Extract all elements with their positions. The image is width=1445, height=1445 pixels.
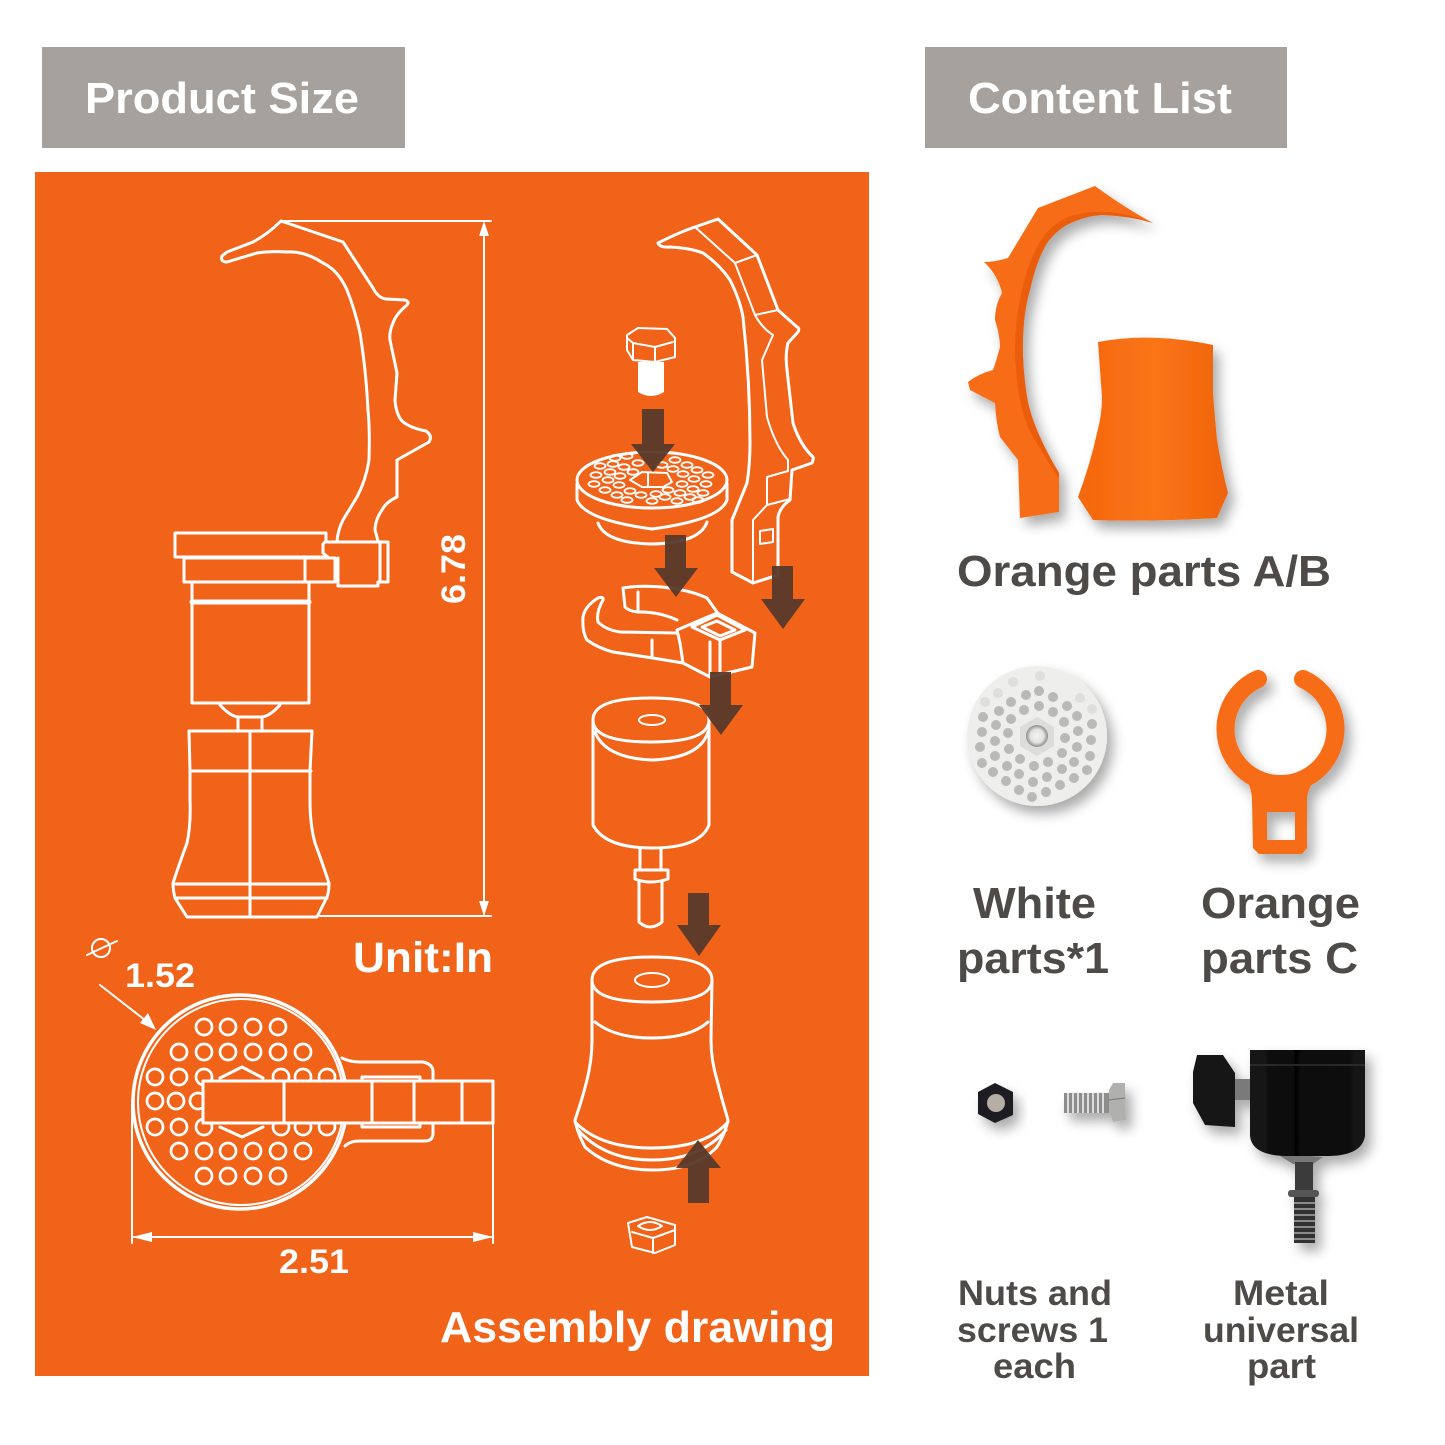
clamp and arm from above xyxy=(342,1058,433,1146)
exploded nut xyxy=(628,1217,675,1253)
heading: Content List: Content List xyxy=(968,74,1232,123)
label: nuts and screws xyxy=(957,1274,1112,1386)
photo: screw xyxy=(1064,1083,1126,1122)
unit label: Unit:In xyxy=(353,934,493,982)
top view drawing with dimensions: 2.51 xyxy=(279,1243,349,1281)
photo: white part xyxy=(967,666,1107,806)
base vase xyxy=(173,731,329,917)
top view drawing with dimensions xyxy=(87,939,493,1281)
heading: Product Size xyxy=(42,47,405,148)
exploded perforated disc xyxy=(577,452,727,544)
exploded screw xyxy=(627,328,675,396)
photo: nut xyxy=(978,1083,1013,1123)
label: orange parts C xyxy=(1201,879,1360,983)
dimension 6.78 xyxy=(283,221,491,916)
connecting stem xyxy=(220,705,280,730)
photo: metal universal part xyxy=(1193,1050,1365,1243)
part B vase xyxy=(1078,338,1228,521)
exploded arm xyxy=(658,219,813,583)
label: metal universal part: universal xyxy=(1203,1311,1359,1350)
label: white parts xyxy=(957,879,1109,983)
label: metal universal part xyxy=(1203,1274,1359,1386)
disc xyxy=(133,995,347,1209)
caption: assembly drawing: Assembly drawing xyxy=(440,1303,835,1352)
disc holes xyxy=(147,1019,335,1184)
label: white parts: White xyxy=(973,879,1096,928)
label: white parts: parts*1 xyxy=(957,934,1109,983)
label: orange parts A/B: Orange parts A/B xyxy=(957,547,1331,596)
cylinder body xyxy=(192,582,309,703)
side view drawing with height dimension: 6.78 xyxy=(435,534,473,604)
side view drawing with height dimension xyxy=(173,221,491,917)
top view drawing with dimensions: 1.52 xyxy=(125,957,195,995)
label: orange parts C: Orange xyxy=(1201,879,1360,928)
arm outline xyxy=(222,221,430,541)
heading: Content List xyxy=(925,47,1287,148)
panel: assembly drawing xyxy=(35,172,869,1376)
photo: orange part C xyxy=(1226,679,1335,854)
exploded base xyxy=(575,957,728,1170)
label: metal universal part: Metal xyxy=(1233,1274,1329,1313)
label: nuts and screws: screws 1 xyxy=(957,1311,1108,1350)
label: nuts and screws: each xyxy=(993,1347,1076,1386)
clamp plates xyxy=(175,533,388,586)
exploded C clamp xyxy=(583,586,755,677)
label: nuts and screws: Nuts and xyxy=(958,1274,1112,1313)
part A arm xyxy=(968,186,1153,518)
dimension 2.51 xyxy=(132,1100,493,1243)
diameter symbol and label xyxy=(92,939,110,957)
arrows: assembly direction xyxy=(631,409,805,1203)
exploded view drawing xyxy=(575,219,813,1253)
exploded cylinder xyxy=(593,698,709,927)
heading: Product Size: Product Size xyxy=(85,74,359,123)
label: metal universal part: part xyxy=(1247,1347,1316,1386)
photo: orange parts A and B xyxy=(968,186,1228,521)
label: orange parts C: parts C xyxy=(1201,934,1358,983)
